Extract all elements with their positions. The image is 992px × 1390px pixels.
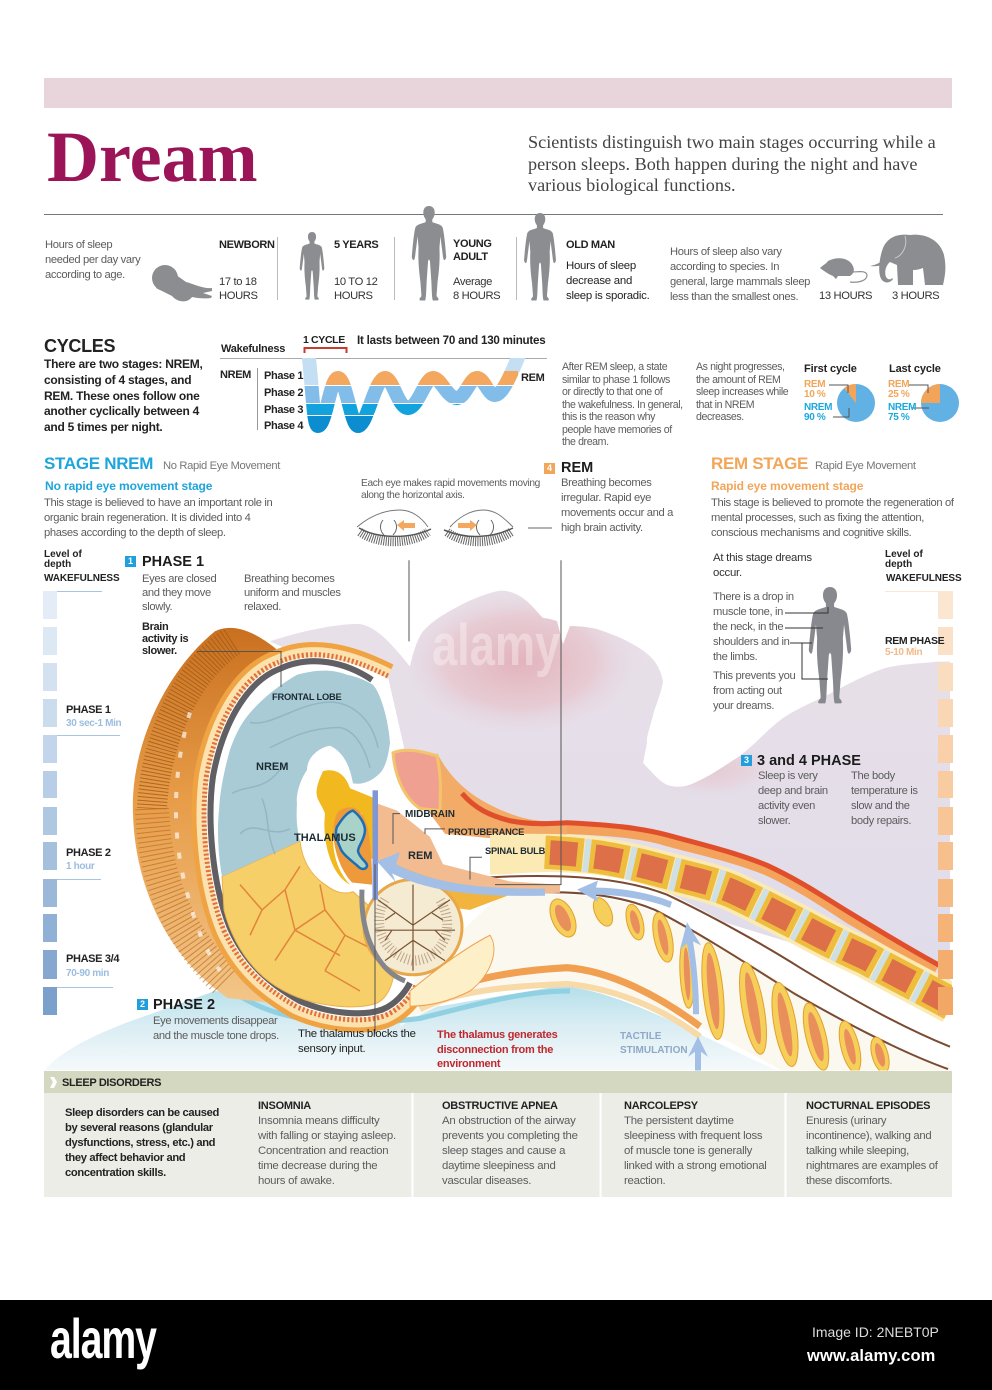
text: nocturnal episodes: nightmares are examples of [806,1160,938,1172]
neck flush [689,754,756,788]
badge: 4: 4 [547,463,552,473]
text: acting out: your dreams. [713,700,774,712]
text: REM stage [711,497,954,539]
icon: newborn silhouette [152,265,212,301]
legend: last cycle REM: 25 % [888,389,909,400]
icon: REM stage man silhouette [809,587,851,703]
text: 5 years hours: HOURS [334,290,373,302]
text: newborn hours [219,276,258,302]
text: muscle tone: the neck, in the [713,621,783,633]
text: insomnia: Insomnia means difficulty [258,1115,379,1127]
footer image id: Image ID: 2NEBT0P [812,1324,939,1340]
label: wakefulness left: WAKEFULNESS [44,573,120,584]
heading: nocturnal episodes: NOCTURNAL EPISODES [806,1100,930,1112]
text: young adult hours: Average [453,276,492,288]
subheading: no rapid eye movement: No Rapid Eye Movement [163,460,280,472]
legend: last cycle NREM [888,402,916,423]
text: thalamus disconnection: The thalamus generates [437,1029,557,1041]
header rule [44,214,943,215]
label: tactile stimulation: STIMULATION [620,1045,688,1056]
text: REM: high brain activity. [561,522,643,534]
text: night progress: sleep increases while [696,386,788,398]
ribs [545,895,893,1075]
leader lines [197,536,561,1034]
thalamus and golden midbrain tissue [317,770,380,885]
legend: last cycle NREM: 75 % [888,412,909,423]
text: causes [65,1107,219,1179]
legend: first cycle REM: REM [804,379,825,390]
text: eye movement [361,478,540,501]
badge: 1: 1 [128,556,133,566]
legend: first cycle NREM: NREM [804,402,832,413]
text: NREM stage [44,497,272,539]
text: insomnia: time decrease during the [258,1160,377,1172]
text: newborn hours: HOURS [219,290,258,302]
label: tactile stimulation [620,1031,688,1056]
label: level of depth left: depth [44,559,71,570]
text: after REM: this is the reason why [562,411,655,423]
legend: first cycle NREM: 90 % [804,412,825,423]
text: after REM: or directly to that one of [562,386,662,398]
legend: first cycle NREM [804,402,832,423]
pillow [44,986,780,1072]
scale time: phase 3/4: 70-90 min [66,968,109,979]
intro text: Scientists distinguish two main stages occurring while a [528,132,936,152]
badge: 3: 3 [744,755,749,765]
text: cycles: another cyclically between 4 [44,404,199,418]
text: night progress: As night progresses, [696,361,785,373]
text: newborn hours: 17 to 18 [219,276,257,288]
heading: sleep disorders: SLEEP DISORDERS [62,1077,161,1089]
label: level of depth left: Level of [44,549,82,560]
label: level of depth left [44,549,82,570]
pillow contact shadow [240,991,570,1023]
text: young adult [453,238,492,263]
text: cycles: REM. These ones follow one [44,389,200,403]
text: brain activity: Brain [142,621,168,633]
text: phase 2: Eye movements disappear [153,1015,277,1027]
pie chart: first cycle [829,384,875,422]
text: narcolepsy: of muscle tone is generally [624,1145,752,1157]
text: phase 1 eyes [142,573,216,613]
title: Dream [47,117,258,197]
text: 5 years hours: 10 TO 12 [334,276,377,288]
back muscle band [567,828,937,969]
text: hours of sleep by age: according to age. [45,269,125,281]
arrow: signal to thalamus [377,852,545,896]
badge: 1 [125,556,136,567]
anatomy label: frontal lobe: FRONTAL LOBE [272,692,342,702]
text: narcolepsy: linked with a strong emotional [624,1160,767,1172]
text: hours of sleep by age: Hours of sleep [45,239,112,251]
text: hours of sleep by age: needed per day vary [45,254,140,266]
text: causes: they affect behavior and [65,1152,185,1164]
label: NREM axis: NREM [220,369,251,381]
anatomy label: thalamus: THALAMUS [294,832,356,844]
text: after REM: people have memories of [562,424,672,436]
facial flush [426,604,614,718]
text: rat hours: 13 HOURS [819,290,872,302]
text: apnea: vascular diseases. [442,1175,531,1187]
text: eye movement: Each eye makes rapid movements moving [361,478,540,489]
heading: phase 2: PHASE 2 [153,997,215,1013]
heading: phase 1: PHASE 1 [142,554,204,570]
text: body temperature: slow and the [851,800,910,812]
scale label: phase 1: PHASE 1 [66,704,111,716]
text: apnea: daytime sleepiness and [442,1160,556,1172]
text: nocturnal episodes: these discomforts. [806,1175,892,1187]
text: body temperature: The body [851,770,895,782]
label: last cycle: Last cycle [889,363,941,375]
text: body temperature [851,770,918,827]
text: phase 1 breathing: Breathing becomes [244,573,334,585]
muscle tone callout lines [785,607,828,679]
label: tactile stimulation: TACTILE [620,1031,661,1042]
intro text: person sleeps. Both happen during the night and have [528,154,917,174]
text: NREM stage: This stage is believed to have an important role in [44,497,272,509]
sleeping figure anatomy illustration [44,536,952,1078]
sleep disorders body panel [44,1093,952,1197]
text: phase 2 [153,1015,279,1042]
heading: 3 and 4 phase: 3 and 4 PHASE [757,753,861,769]
text: REM: movements occur and a [561,507,673,519]
text: insomnia [258,1115,396,1187]
text: young adult hours: 8 HOURS [453,290,500,302]
legend: first cycle REM [804,379,826,400]
intro text: various biological functions. [528,175,736,195]
text: muscle tone: the limbs. [713,651,757,663]
text: REM stage: This stage is believed to promote the regeneration of [711,497,954,509]
text: muscle tone: shoulders and in [713,636,790,648]
scale time: phase 2: 1 hour [66,861,94,872]
text: narcolepsy: reaction. [624,1175,665,1187]
scale time: REM phase: 5-10 Min [885,647,922,658]
text: apnea [442,1115,578,1187]
text: 5 years hours [334,276,378,302]
text: after REM: the wakefulness. In general, [562,398,683,410]
text: old man hours: Hours of sleep [566,260,636,272]
legend: first cycle REM: 10 % [804,389,825,400]
text: nocturnal episodes [806,1115,938,1187]
throat orange tissue [430,753,567,840]
text: muscle tone: There is a drop in [713,591,794,603]
pie chart: last cycle [908,384,959,422]
label: level of depth right: depth [885,559,912,570]
legend: last cycle REM [888,379,910,400]
text: species [670,246,810,303]
text: after REM: similar to phase 1 follows [562,374,670,386]
label: level of depth right: Level of [885,549,923,560]
arrow: tactile signal up spine [680,922,701,1014]
text: causes: concentration skills. [65,1167,166,1179]
heading: REM stage: REM STAGE [711,454,808,473]
legend: last cycle REM: REM [888,379,909,390]
label: phases: Phase 2 [264,387,303,399]
text: phase 1 eyes: slowly. [142,601,172,613]
badge: 2: 2 [140,999,145,1009]
text: dreams occur [713,552,812,579]
text: night progress: the amount of REM [696,374,780,386]
scale label: phase 2: PHASE 2 [66,847,111,859]
left depth scale [43,591,120,1015]
text: dreams occur: occur. [713,567,742,579]
text: REM: irregular. Rapid eye [561,492,651,504]
text: phase 2: and the muscle tone drops. [153,1030,279,1042]
upper brain blue NREM area [218,671,390,876]
lower brain yellow hemisphere [222,841,394,1007]
text: cycles: There are two stages: NREM, [44,357,203,371]
intro text [528,132,936,195]
anatomy label: midbrain: MIDBRAIN [405,809,455,820]
lower body white tissue [400,885,950,1072]
text: causes: Sleep disorders can be caused [65,1107,219,1119]
text: night progress [696,361,788,423]
text: nocturnal episodes: Enuresis (urinary [806,1115,886,1127]
heading: REM: REM [561,460,593,476]
spinal cord [470,883,950,1057]
text: acting out: This prevents you [713,670,795,682]
text: newborn: NEWBORN [219,239,275,251]
label: REM axis: REM [521,372,544,384]
text: phase 1 eyes: and they move [142,587,211,599]
vertebrae column [490,852,952,1004]
cycle axis [220,358,547,359]
label: level of depth right [885,549,923,570]
text: species: general, large mammals sleep [670,276,810,288]
text: deep sleep [758,770,828,827]
text: after REM: After REM sleep, a state [562,361,667,373]
text: REM [561,477,674,534]
text: thalamus blocks: sensory input. [298,1043,365,1055]
text: NREM stage: phases according to the depth of sleep. [44,527,226,539]
scale label: REM phase: REM PHASE [885,635,944,647]
text: phase 1 breathing: relaxed. [244,601,281,613]
label: 1 cycle: 1 CYCLE [303,334,345,346]
text: old man hours [566,260,650,302]
text: deep sleep: Sleep is very [758,770,818,782]
REM peach brain stem [377,804,560,895]
footer logo: alamy [50,1307,156,1370]
text: insomnia: hours of awake. [258,1175,335,1187]
text: species: less than the smallest ones. [670,291,798,303]
sleep disorders band [44,1071,952,1093]
text: eye movement: along the horizontal axis. [361,490,465,501]
strapline: NREM: No rapid eye movement stage [45,479,212,493]
text: causes: dysfunctions, stress, etc.) and [65,1137,215,1149]
text: cycles: consisting of 4 stages, and [44,373,191,387]
text: young adult: YOUNG [453,238,492,250]
text: NREM stage: organic brain regeneration. It is divided into 4 [44,512,250,524]
text: muscle tone: muscle tone, in [713,606,783,618]
text: apnea: prevents you completing the [442,1130,578,1142]
text: causes: by several reasons (glandular [65,1122,213,1134]
icon: left eye looking left [357,510,431,542]
label: phases: Phase 3 [264,404,303,416]
text: thalamus disconnection [437,1029,558,1070]
text: 5 years: 5 YEARS [334,239,378,251]
label: phases: Phase 4 [264,420,303,432]
anatomy label: NREM: NREM [256,761,288,773]
icon: chevron [50,1077,57,1088]
text: old man hours: decrease and [566,275,632,287]
label: wakefulness right: WAKEFULNESS [886,573,962,584]
text: elephant hours: 3 HOURS [892,290,939,302]
label: first cycle: First cycle [804,363,857,375]
text: night progress: decreases. [696,411,744,423]
text: night progress: that in NREM [696,398,754,410]
icon: elephant silhouette [870,235,945,285]
text: REM stage: mental processes, such as fixing the attention, [711,512,924,524]
anatomy label: REM: REM [408,850,432,862]
badge: 3 [741,755,752,766]
text: muscle tone [713,591,794,663]
chest skin layers above pillow [479,964,702,1030]
text: brain activity: activity is [142,633,188,645]
watermark: alamy [432,614,560,678]
text: cycles: and 5 times per night. [44,420,163,434]
text: phase 1 breathing [244,573,341,613]
icon: five-year-old silhouette [300,232,324,300]
text: thalamus blocks [298,1028,416,1055]
badge: 2 [137,999,148,1010]
anatomy label: spinal bulb: SPINAL BULB [485,846,545,856]
legend: last cycle NREM: NREM [888,402,916,413]
text: body temperature: temperature is [851,785,918,797]
text: after REM [562,361,683,448]
text: insomnia: with falling or staying asleep. [258,1130,396,1142]
text: narcolepsy [624,1115,767,1187]
neck tissue bottom [410,935,494,1006]
text: brain activity: slower. [142,645,177,657]
cycle chart wave [308,348,522,426]
heading: stage NREM: STAGE NREM [44,454,153,473]
text: nocturnal episodes: incontinence), walking and [806,1130,931,1142]
arrow: signal along spine [577,881,672,908]
label: wakefulness: Wakefulness [221,343,285,355]
icon: old man silhouette [524,213,556,301]
text: REM: Breathing becomes [561,477,651,489]
label: phases: Phase 1 [264,370,303,382]
text: dreams occur: At this stage dreams [713,552,812,564]
text: acting out [713,670,795,712]
text: body temperature: body repairs. [851,815,911,827]
subheading: rapid eye movement: Rapid Eye Movement [815,460,916,472]
text: nocturnal episodes: talking while sleeping, [806,1145,909,1157]
text: brain activity [142,621,188,657]
text: thalamus blocks: The thalamus blocks the [298,1028,416,1040]
arrow: tactile stimulation entry [688,1036,708,1070]
text: phase 1 breathing: uniform and muscles [244,587,341,599]
text: young adult: ADULT [453,251,488,263]
cycle bracket [304,348,346,353]
nasal passage pink [393,750,440,811]
rib marrow [552,903,887,1068]
label: phases [264,370,304,432]
hair [132,628,276,1002]
heading: obstructive apnea: OBSTRUCTIVE APNEA [442,1100,558,1112]
text: apnea: sleep stages and cause a [442,1145,565,1157]
body mass lavender [270,591,950,991]
heading: insomnia: INSOMNIA [258,1100,311,1112]
text: cycles [44,357,203,434]
text: narcolepsy: The persistent daytime [624,1115,734,1127]
title band [44,78,952,108]
text: deep sleep: deep and brain [758,785,828,797]
heading: narcolepsy: NARCOLEPSY [624,1100,698,1112]
text: deep sleep: slower. [758,815,790,827]
brain stem dark triangle [401,866,508,910]
heading: cycles: CYCLES [44,336,115,356]
scale time: phase 1: 30 sec-1 Min [66,718,121,729]
footer url: www.alamy.com [807,1347,936,1365]
text: thalamus disconnection: environment [437,1058,500,1070]
text: narcolepsy: sleepiness with frequent loss [624,1130,762,1142]
text: young adult hours [453,276,500,302]
text: thalamus disconnection: disconnection from the [437,1044,553,1056]
footer bar [0,1300,992,1390]
badge: 4 [544,463,555,474]
fourth ventricle wall [362,890,405,981]
text: acting out: from acting out [713,685,782,697]
text: species: Hours of sleep also vary [670,246,782,258]
icon: rat silhouette [820,258,867,282]
scalp and skull rings [211,661,415,1013]
icon: young adult silhouette [412,206,446,301]
age separators [278,237,516,300]
right depth scale [885,591,953,1015]
icon: right eye looking right [444,510,552,542]
text: phase 1 eyes: Eyes are closed [142,573,216,585]
text: old man: OLD MAN [566,239,615,251]
text: hours of sleep by age [45,239,141,281]
text: apnea: An obstruction of the airway [442,1115,576,1127]
anatomy label: protuberance: PROTUBERANCE [448,827,524,837]
text: deep sleep: activity even [758,800,815,812]
text: old man hours: sleep is sporadic. [566,290,650,302]
text: insomnia: Concentration and reaction [258,1145,388,1157]
text: species: according to species. In [670,261,779,273]
cerebellum [364,880,462,975]
text: after REM: the dream. [562,436,609,448]
strapline: REM: Rapid eye movement stage [711,479,863,493]
label: cycle length: It lasts between 70 and 130 minutes [357,334,545,347]
scale label: phase 3/4: PHASE 3/4 [66,953,119,965]
text: REM stage: conscious mechanisms and cognitive skills. [711,527,911,539]
blocking bar [372,790,378,900]
